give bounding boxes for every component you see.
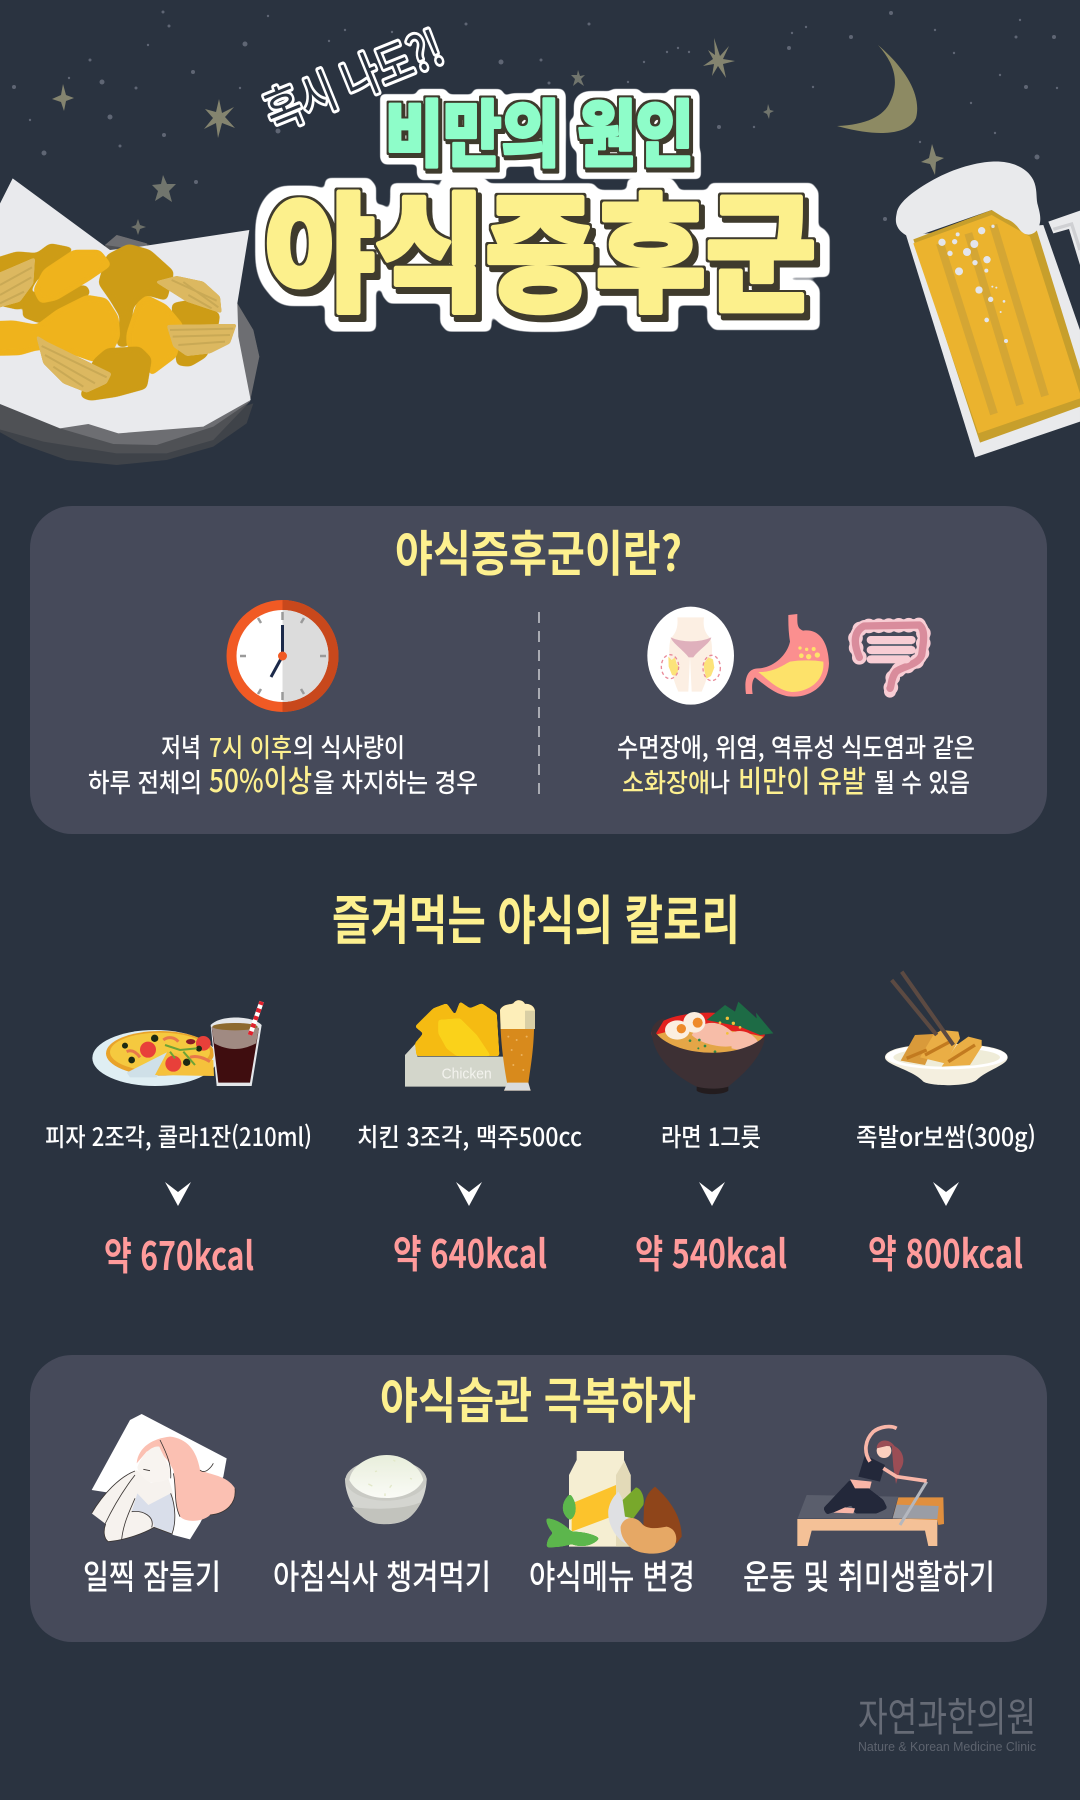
panel heading: 야식증후군이란?	[395, 515, 682, 586]
definition text line 2: 을 차지하는 경우	[313, 763, 478, 800]
food label: ramen: 라면 1그릇	[661, 1118, 761, 1154]
action label: sleep: 일찍 잠들기	[83, 1550, 221, 1599]
panel: overcoming night eating	[30, 1355, 1047, 1642]
panel: what is night eating syndrome	[30, 506, 1047, 834]
arrow 2	[456, 1182, 482, 1206]
panel heading: 야식습관 극복하자	[380, 1362, 696, 1433]
arrow 4	[933, 1182, 959, 1206]
icon: chicken and beer	[405, 1000, 535, 1091]
main title: 야식증후군	[265, 152, 816, 337]
clinic logo: Nature & Korean Medicine Clinic	[858, 1739, 1036, 1754]
food label: chicken: 치킨 3조각, 맥주500cc	[357, 1118, 582, 1154]
kcal: pizza: 약 670kcal	[104, 1226, 254, 1282]
icon: stomach	[745, 614, 829, 697]
effects text: 수면장애, 위염, 역류성 식도염과 같은	[617, 728, 975, 765]
effects text line 2: 비만이 유발	[738, 757, 866, 801]
definition text line 2: 하루 전체의	[88, 763, 202, 800]
crescent moon	[837, 45, 917, 133]
subtitle: 비만의 원인	[385, 76, 694, 181]
icon: intestine	[855, 625, 924, 692]
icon: sleeping woman	[92, 1414, 235, 1542]
icon: pizza and cola	[92, 1002, 262, 1086]
illustration: fried chicken and chips on paper	[0, 178, 263, 465]
definition text: 의 식사량이	[293, 728, 405, 765]
icon: thigh fat	[647, 607, 734, 705]
food label: pizza: 피자 2조각, 콜라1잔(210ml)	[45, 1118, 312, 1154]
icon: rice bowl	[345, 1455, 427, 1524]
definition text: 7시 이후	[209, 728, 292, 765]
sparkle stars	[52, 38, 944, 235]
effects text line 2: 될 수 있음	[874, 763, 970, 800]
section heading: calories: 즐겨먹는 야식의 칼로리	[332, 879, 740, 955]
effects text line 2: 나	[710, 763, 730, 800]
arrow 1	[165, 1182, 191, 1206]
night sky stars	[12, 10, 1058, 221]
kcal: chicken: 약 640kcal	[393, 1224, 547, 1280]
icon: pork hocks plate	[885, 972, 1008, 1085]
foam bubbles	[938, 225, 1008, 343]
food label: pork: 족발or보쌈(300g)	[856, 1118, 1036, 1154]
kcal: ramen: 약 540kcal	[635, 1224, 787, 1280]
ridged chips	[0, 257, 237, 393]
action label: breakfast: 아침식사 챙겨먹기	[273, 1550, 491, 1599]
icon: ramen bowl	[652, 1002, 773, 1094]
clinic logo: 자연과한의원	[858, 1685, 1036, 1743]
arrow 3	[699, 1182, 725, 1206]
action label: menu: 야식메뉴 변경	[529, 1550, 695, 1599]
icon: pilates	[797, 1427, 944, 1546]
definition text line 2: 50%이상	[209, 756, 312, 801]
definition text: 저녁	[161, 728, 201, 765]
kcal: pork: 약 800kcal	[868, 1224, 1023, 1280]
icon: milk and nuts	[546, 1451, 682, 1554]
chicken pieces	[0, 243, 220, 367]
action label: exercise: 운동 및 취미생활하기	[743, 1550, 995, 1599]
icon: clock	[226, 600, 338, 712]
effects text line 2: 소화장애	[622, 763, 710, 800]
icon: chicken and beer: Chicken	[442, 1067, 492, 1083]
divider	[538, 612, 540, 795]
illustration: beer mug	[896, 162, 1080, 457]
